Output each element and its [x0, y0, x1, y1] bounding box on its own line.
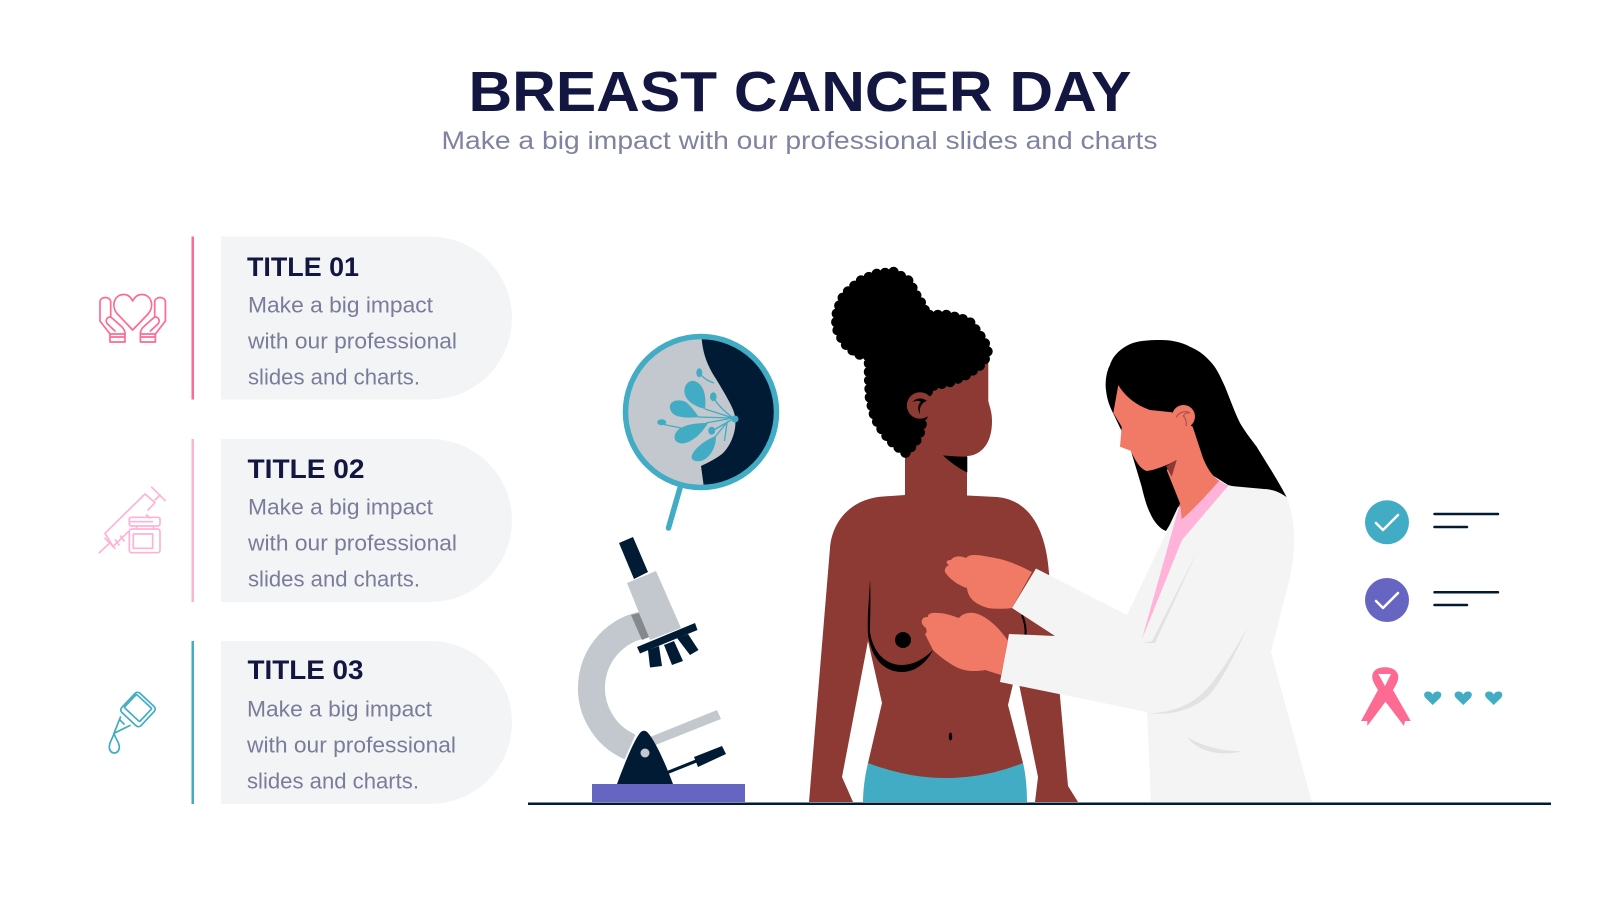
infographic canvas	[98, 72, 1551, 805]
check badge purple	[1365, 578, 1409, 622]
title: BREAST CANCER DAY	[468, 60, 1132, 124]
milk ducts	[657, 368, 738, 461]
patient body	[809, 360, 1078, 802]
small lobes	[696, 368, 702, 377]
bottle	[119, 691, 157, 728]
illustration: breast diagram lens	[626, 330, 790, 528]
face and neck	[1113, 385, 1219, 519]
body text 02: with our professional	[247, 530, 457, 556]
accent bar 02	[192, 439, 194, 602]
body text 02	[247, 494, 457, 592]
body text 01: slides and charts.	[248, 364, 420, 390]
navel	[949, 732, 952, 740]
nipple	[895, 632, 911, 648]
illustration: doctor	[922, 340, 1312, 802]
right hand	[140, 298, 165, 342]
tube joint	[631, 613, 649, 640]
heart	[114, 294, 152, 330]
nosepiece and objectives	[637, 623, 698, 668]
coat shadow: pocket	[1187, 737, 1243, 753]
coat shadow: sleeve	[1147, 626, 1248, 714]
eyepiece	[619, 537, 648, 579]
large lobes	[684, 381, 705, 409]
stand hole	[640, 748, 650, 758]
syringe	[99, 538, 115, 553]
text placeholder lines	[1434, 514, 1498, 527]
lens handle	[668, 488, 680, 528]
left hand	[100, 298, 125, 342]
icon: syringe and vial	[99, 487, 165, 553]
text placeholder lines	[1434, 592, 1498, 605]
heading 01: TITLE 01	[247, 252, 359, 282]
far breast line	[1022, 615, 1026, 635]
lower hand	[922, 613, 1008, 675]
ground line	[528, 802, 1551, 805]
vial	[129, 517, 160, 526]
stand	[617, 731, 673, 784]
ear	[907, 392, 933, 419]
doctor ear	[1172, 405, 1195, 428]
body text 03	[246, 696, 456, 794]
nipple point	[732, 416, 738, 422]
icon: dropper bottle	[109, 691, 157, 753]
illustration: patient	[809, 272, 1078, 802]
card 03	[221, 641, 512, 804]
neck shadow	[1166, 460, 1177, 477]
focus knob	[667, 746, 726, 774]
hair curls	[836, 272, 988, 453]
body text 03: with our professional	[246, 732, 456, 758]
doctor ear detail	[1176, 412, 1190, 426]
illustration: microscope	[591, 537, 745, 802]
accent bar 01	[192, 236, 194, 400]
body text 03: slides and charts.	[247, 768, 419, 794]
coat	[1000, 486, 1312, 802]
breast outline	[868, 580, 933, 672]
dark chest area	[701, 339, 774, 485]
checklist item 1	[1365, 500, 1498, 544]
ear detail	[912, 398, 927, 414]
tube	[627, 571, 681, 640]
body text 03: Make a big impact	[247, 696, 432, 722]
doctor hair	[1106, 340, 1287, 531]
lens background	[626, 336, 776, 488]
heading 02: TITLE 02	[248, 454, 364, 484]
bottle label	[124, 694, 152, 722]
check badge teal	[1365, 500, 1409, 544]
subtitle: Make a big impact with our professional slides and charts	[442, 127, 1158, 155]
duct lines	[664, 373, 733, 441]
heading 03: TITLE 03	[248, 655, 364, 685]
pink shirt	[1142, 481, 1228, 639]
jaw shadow	[943, 456, 967, 472]
card 02	[221, 439, 512, 602]
icon: pink ribbon	[1361, 667, 1411, 726]
body text 01	[247, 292, 457, 390]
base	[592, 784, 745, 802]
coat shadow: lapel	[1142, 550, 1198, 643]
icon: three hearts	[1424, 692, 1502, 705]
panel: item 02	[192, 439, 512, 602]
drop	[109, 733, 119, 753]
arm	[591, 624, 645, 747]
panel: item 01	[192, 236, 512, 400]
upper hand	[945, 555, 1032, 609]
nozzle	[114, 717, 130, 733]
body text 01: with our professional	[247, 328, 457, 354]
shorts	[863, 763, 1027, 802]
check mark	[1376, 593, 1398, 608]
panel: item 03	[192, 641, 512, 804]
body text 01: Make a big impact	[248, 292, 433, 318]
icon: hands holding heart	[100, 294, 165, 342]
card 01	[221, 236, 512, 400]
body text 02: slides and charts.	[248, 566, 420, 592]
stage	[650, 710, 721, 746]
check mark	[1376, 515, 1398, 530]
checklist item 2	[1365, 578, 1498, 622]
body text 02: Make a big impact	[248, 494, 433, 520]
lens ring	[626, 336, 776, 488]
accent bar 03	[192, 641, 194, 804]
hair fill	[836, 272, 988, 453]
